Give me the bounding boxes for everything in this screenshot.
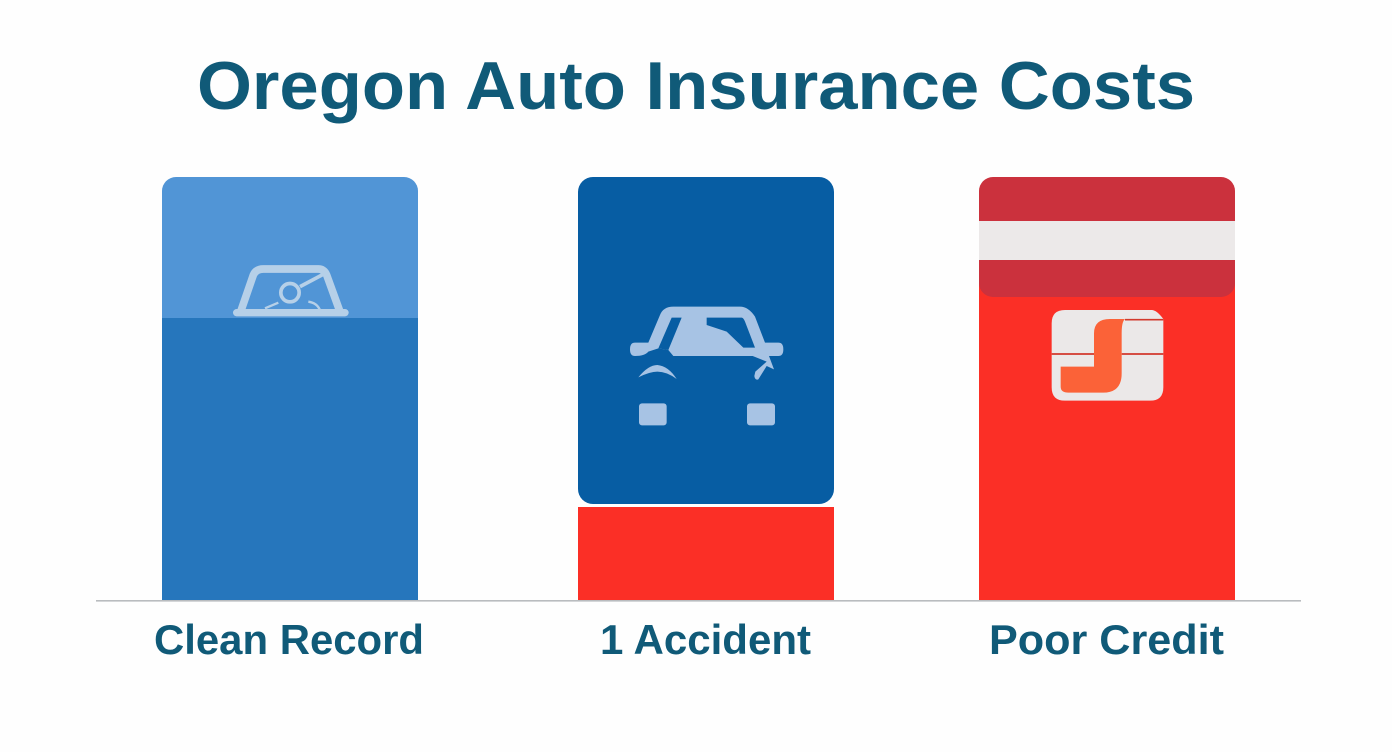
bar body bbox=[162, 318, 418, 600]
icon: credit card chip bbox=[1052, 310, 1163, 401]
icon: damaged car bbox=[630, 307, 783, 425]
bar top section bbox=[979, 177, 1235, 297]
card stripe bbox=[979, 221, 1235, 260]
bar: clean record bbox=[162, 177, 418, 600]
bar bottom section bbox=[578, 507, 834, 600]
bar: poor credit bbox=[979, 177, 1235, 600]
bar: one accident bbox=[578, 177, 834, 600]
bar body bbox=[979, 280, 1235, 600]
baseline axis bbox=[96, 600, 1301, 602]
label: one accident: 1 Accident bbox=[600, 616, 811, 663]
icon: windshield with wiper bbox=[237, 269, 345, 313]
bar top section bbox=[162, 177, 418, 318]
label: poor credit: Poor Credit bbox=[989, 616, 1224, 663]
bar top section bbox=[578, 177, 834, 504]
title: Oregon Auto Insurance Costs bbox=[197, 48, 1195, 124]
label: clean record: Clean Record bbox=[154, 616, 424, 663]
